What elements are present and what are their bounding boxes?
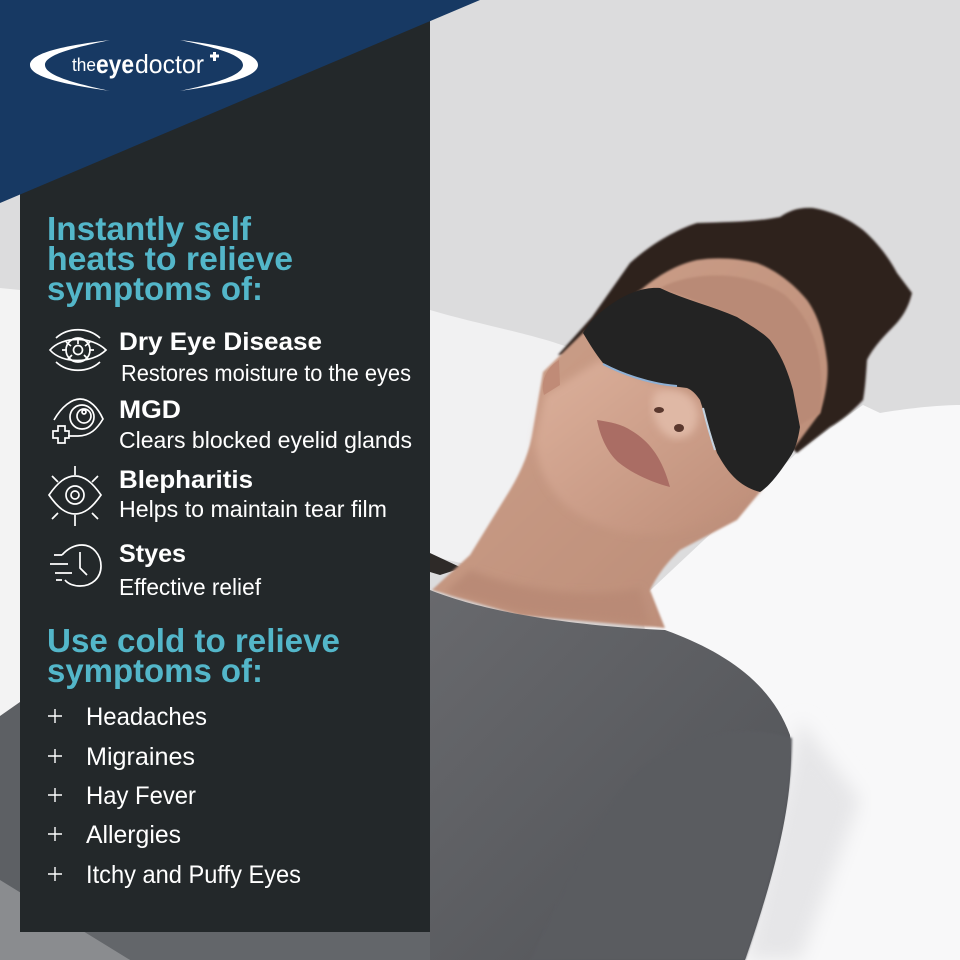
- item: MGD: MGD: [119, 396, 181, 424]
- nose: [652, 390, 698, 438]
- item: Dry Eye Disease: [119, 328, 411, 386]
- blanket bottom strip: [20, 932, 430, 960]
- heading: heat symptoms: Instantly self: [47, 210, 252, 247]
- main pillow: [640, 405, 960, 960]
- neck crease: [445, 570, 650, 625]
- logo: doctor: [135, 49, 204, 79]
- heading: heat symptoms: heats to relieve: [47, 240, 293, 277]
- logo: eye: [96, 49, 134, 79]
- item: Blepharitis: Helps to maintain tear film: [119, 496, 387, 522]
- left pillow behind panel: [0, 288, 20, 716]
- heading: heat symptoms: [47, 210, 293, 307]
- list: cold symptoms: Headaches: [86, 703, 207, 731]
- item: Styes: Styes: [119, 540, 186, 568]
- item: MGD: Clears blocked eyelid glands: [119, 427, 412, 453]
- logo: [30, 40, 258, 91]
- item: Styes: Effective relief: [119, 574, 262, 600]
- eye mask: [583, 288, 800, 492]
- sweater: [430, 590, 791, 960]
- list: cold symptoms: [48, 703, 301, 889]
- logo: the: [72, 55, 96, 75]
- icon: blepharitis radiant eye: [49, 466, 101, 526]
- dark hair at nape: [430, 553, 462, 575]
- mask blue edging: [603, 364, 677, 386]
- pillow shadow beside sweater: [745, 720, 860, 960]
- item: MGD: [119, 396, 412, 453]
- ear: [543, 360, 560, 395]
- item: Dry Eye Disease: Restores moisture to the eyes: [121, 360, 411, 386]
- lips: [597, 420, 670, 487]
- item: Styes: [119, 540, 262, 600]
- list: cold symptoms: Allergies: [86, 821, 181, 849]
- blanket left strip: [0, 702, 20, 960]
- heading: cold symptoms: symptoms of:: [47, 652, 263, 689]
- hair: [558, 208, 912, 453]
- icon: fast clock: [50, 545, 101, 586]
- list: cold symptoms: Itchy and Puffy Eyes: [86, 861, 301, 889]
- back pillow: [430, 310, 575, 565]
- heading: cold symptoms: [47, 622, 340, 689]
- navy corner banner: [0, 0, 480, 203]
- forehead shade: [660, 275, 822, 425]
- item: Blepharitis: Blepharitis: [119, 466, 253, 494]
- icon: MGD eye with cross: [53, 399, 103, 443]
- list: cold symptoms: Migraines: [86, 743, 195, 771]
- heading: heat symptoms: symptoms of:: [47, 270, 263, 307]
- item: Blepharitis: [119, 466, 387, 522]
- sweater sleeve: [530, 731, 792, 960]
- face highlight: [535, 360, 757, 534]
- list: cold symptoms: Hay Fever: [86, 782, 196, 810]
- dark panel background: [20, 0, 430, 932]
- skin: face and neck: [432, 258, 828, 628]
- nostrils: [654, 407, 664, 413]
- icon: dry eye: [50, 330, 106, 370]
- item: Dry Eye Disease: Dry Eye Disease: [119, 328, 322, 356]
- heading: cold symptoms: Use cold to relieve: [47, 622, 340, 659]
